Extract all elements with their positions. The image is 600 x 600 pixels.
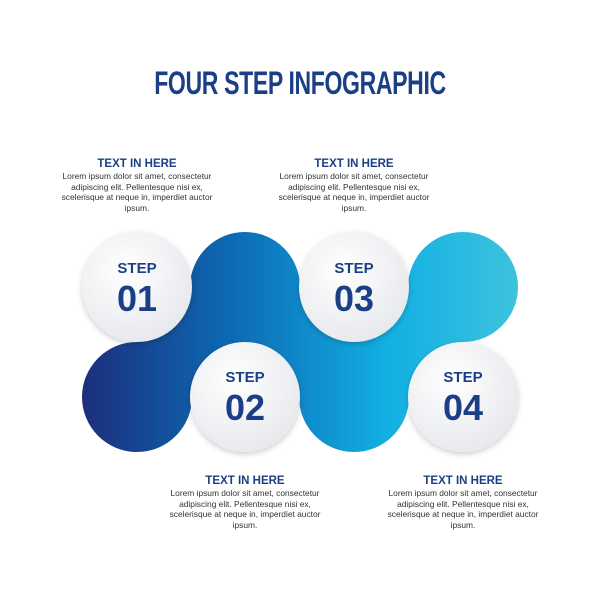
step 03 circle: 03 [334,278,374,319]
text block: step 1: TEXT IN HERE [97,158,177,170]
step 01 circle: STEP [117,260,157,277]
step 01 circle [82,232,192,342]
text block: step 2: TEXT IN HERE [205,475,285,487]
title: FOUR STEP INFOGRAPHIC [154,65,446,101]
step 04 circle: STEP [443,369,483,386]
text block: step 2: Lorem ipsum dolor sit amet, consectetur adipiscing elit. Pellentesque nisi ex, scelerisque at neque in, imperdiet auctor ipsum. [170,488,320,530]
text block: step 3: TEXT IN HERE [314,158,394,170]
step 02 circle: 02 [225,387,265,428]
step 04 circle [408,342,518,452]
text block: step 4: Lorem ipsum dolor sit amet, consectetur adipiscing elit. Pellentesque nisi ex, scelerisque at neque in, imperdiet auctor ipsum. [388,488,538,530]
step 02 circle [190,342,300,452]
step 04 circle: 04 [443,387,483,428]
step 03 circle [299,232,409,342]
text block: step 3: Lorem ipsum dolor sit amet, consectetur adipiscing elit. Pellentesque nisi ex, scelerisque at neque in, imperdiet auctor ipsum. [279,171,429,213]
step 02 circle: STEP [225,369,265,386]
step 03 circle: STEP [334,260,374,277]
text block: step 1: Lorem ipsum dolor sit amet, consectetur adipiscing elit. Pellentesque nisi ex, scelerisque at neque in, imperdiet auctor ipsum. [62,171,212,213]
step 01 circle: 01 [117,278,157,319]
blue wave band [82,232,518,452]
text block: step 4: TEXT IN HERE [423,475,503,487]
